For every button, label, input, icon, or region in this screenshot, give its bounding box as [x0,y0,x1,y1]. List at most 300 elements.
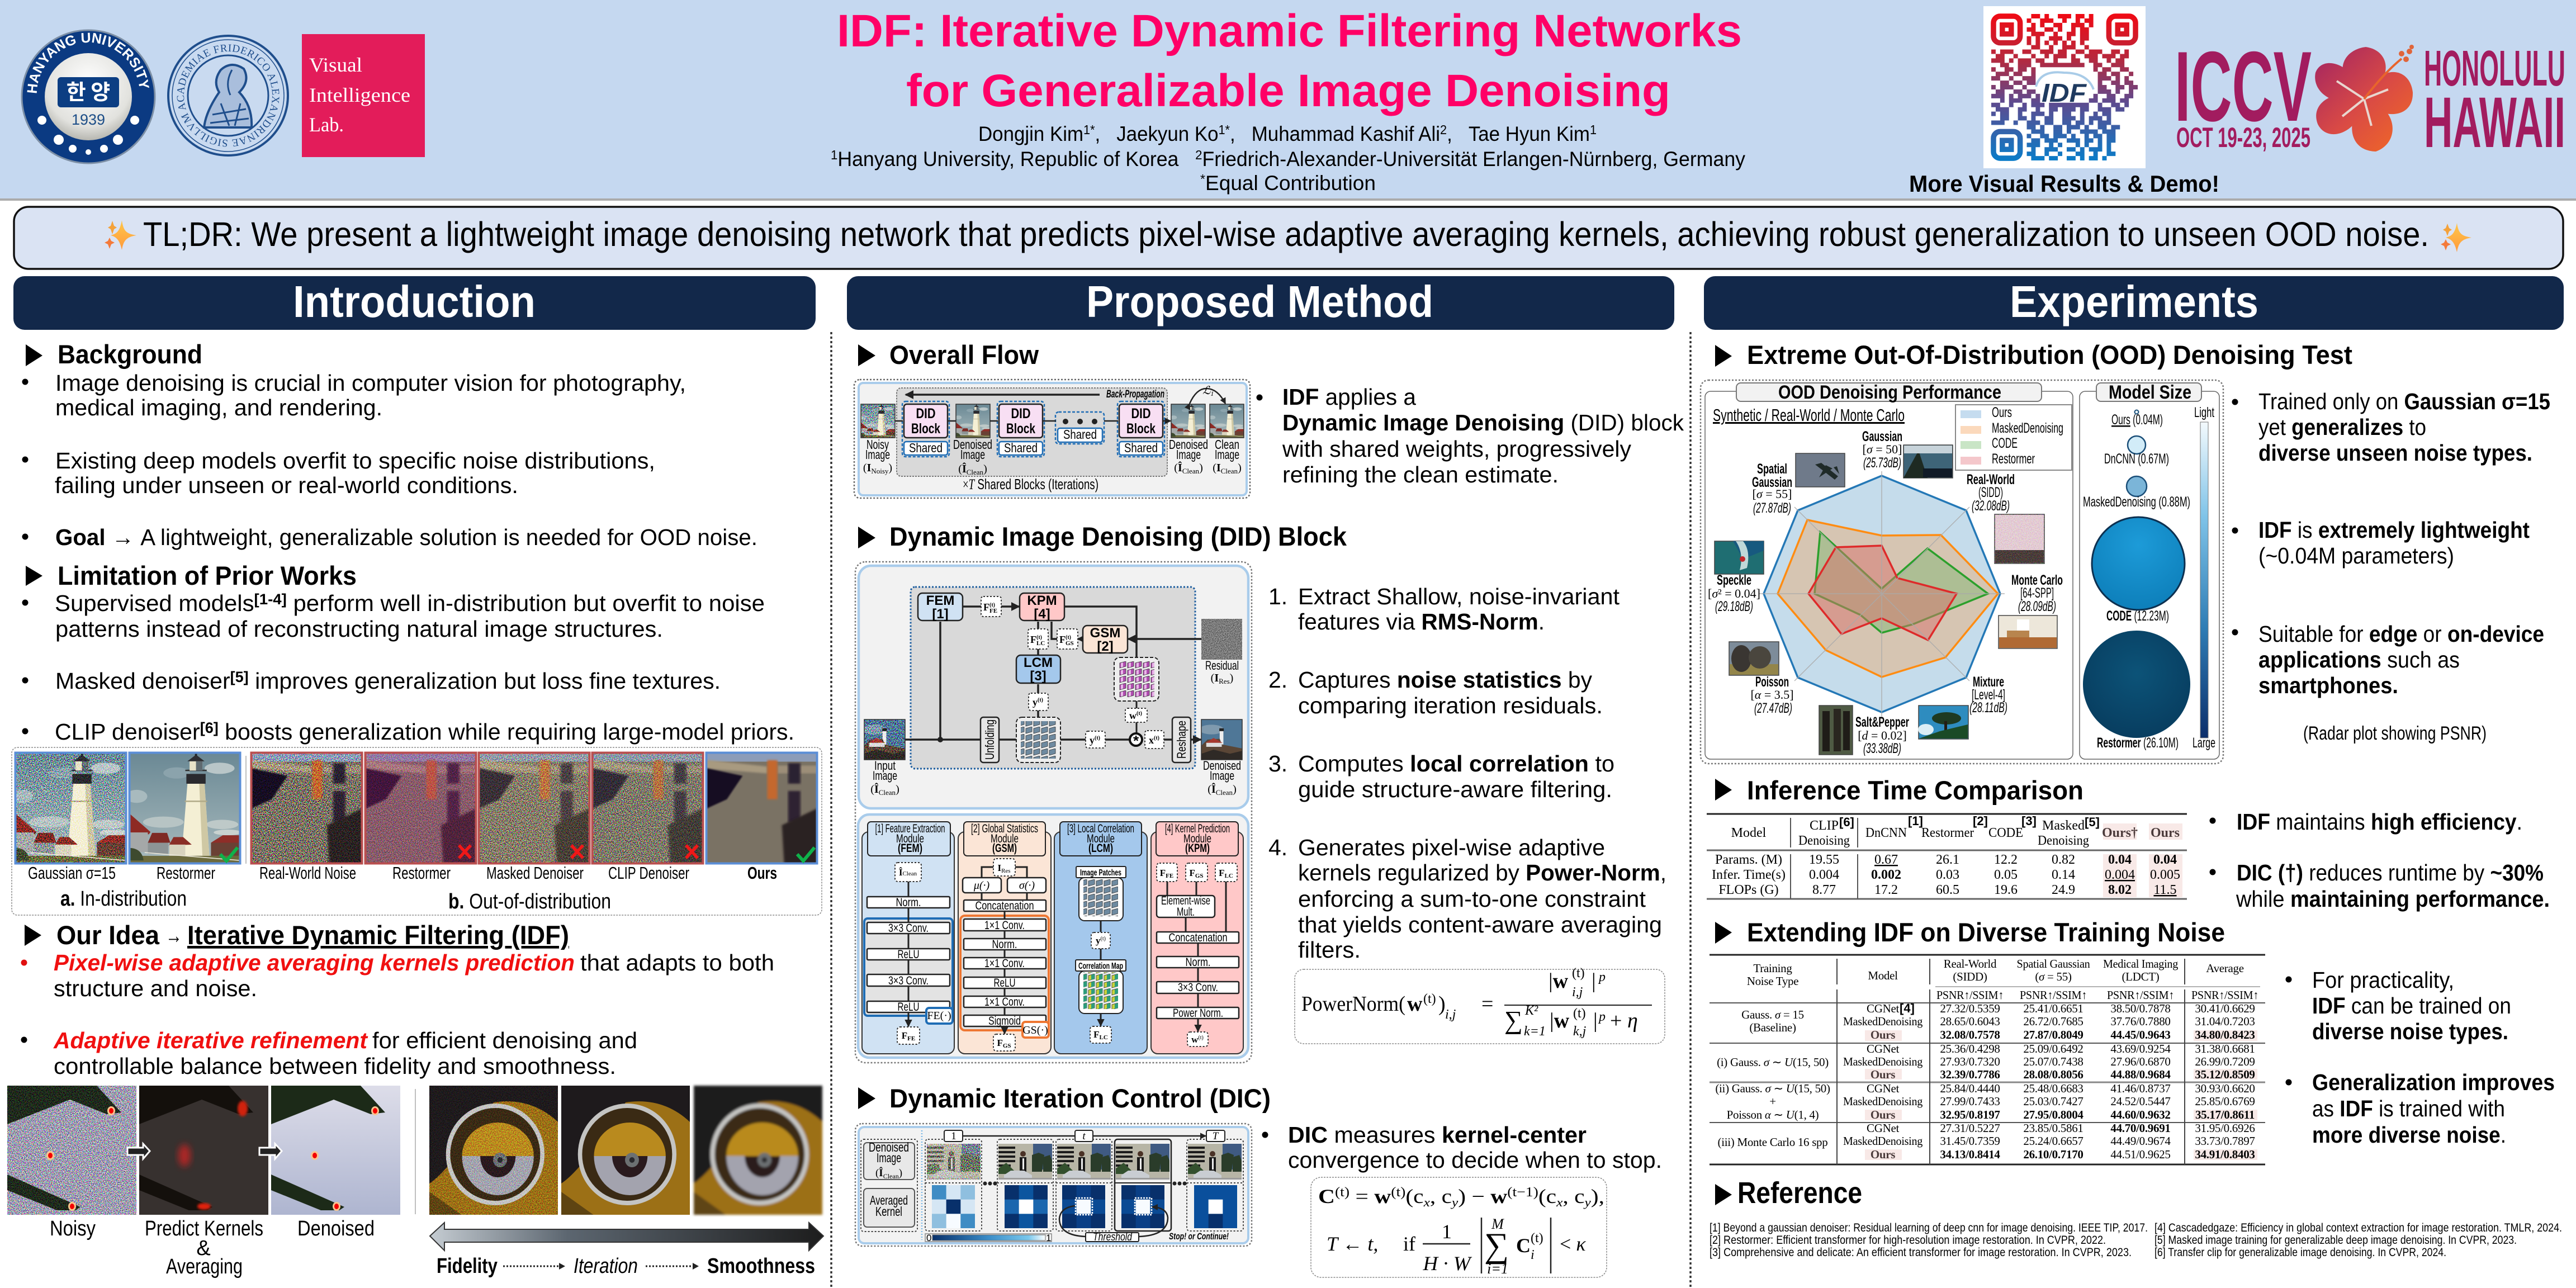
formula: DIC stopping rule: (c [1538,1185,1556,1208]
table: diverse training noise: Noise Type [1747,974,1798,988]
formula: PowerNorm: i,j [1572,985,1583,1000]
table: inference time comparison: 0.004 [1809,868,1839,882]
table: diverse training noise: 23.85/0.5861 [2023,1121,2083,1135]
figure: DIC: Clean [883,1172,899,1180]
header band [0,0,2576,201]
figure: fidelity to smoothness iterations: Iteration [574,1254,638,1278]
table: diverse training noise: 25.09/0.6492 [2023,1042,2083,1055]
table: diverse training noise: (LDCT) [2122,970,2160,983]
table: diverse training noise: CGNet [1867,1042,1899,1055]
table: inference time comparison: 8.02 [2108,883,2132,897]
module: FEM: 3×3 Conv. [888,922,929,935]
legend: Ours [1992,405,2012,420]
figure: overall flow: ) [983,463,987,475]
figure: overall flow: Clean [1221,467,1238,475]
module: KPM: Element-wise [1161,894,1210,907]
formula: DIC stopping rule: w [1374,1185,1391,1208]
module: FEM: FE(·) [927,1010,951,1022]
panel: Our Idea: controllable balance between fidelity and smoothness. [54,1053,616,1079]
radar polygons [1759,471,2005,717]
panel: Limitation of Prior Works: CLIP denoiser [55,719,200,745]
formula: DIC stopping rule: H · W [1422,1252,1472,1275]
table: diverse training noise: [4] [1900,1001,1915,1015]
module: LCM [1054,822,1147,1054]
heading: DID Block: Dynamic Image Denoising (DID) Block [889,522,1347,551]
table: diverse training noise: 32.95/0.8197 [1940,1108,2000,1121]
text: IDF overview [1257,384,1684,487]
text: DIC description: DIC measures kernel-center [1288,1122,1587,1148]
text: DID steps: filters. [1298,937,1361,963]
formula: PowerNorm: | [1593,1009,1598,1033]
radar axis labels: Gaussian [1752,475,1792,490]
figure: overall flow: ℒ [1202,385,1210,397]
figure: DID block architecture: ) [1230,672,1233,684]
formula: DIC stopping rule: M [1491,1216,1504,1232]
formula: PowerNorm: k,j [1573,1024,1587,1039]
table: diverse training noise: + [1769,1095,1776,1108]
figure: fidelity to smoothness iterations: Smoothness [707,1254,815,1278]
table: diverse training noise: 35.12/0.8509 [2195,1068,2255,1081]
text: inference takeaways: while maintaining performance. [2236,886,2550,912]
table: diverse training noise: 24.52/0.5447 [2110,1095,2171,1108]
formula: PowerNorm: K² [1524,1003,1538,1018]
table: inference time comparison: 0.67 [1874,853,1898,867]
radar axis labels: [σ = 55] [1753,487,1792,501]
table: inference time comparison [1707,814,2187,899]
module: GSM: 1×1 Conv. [984,957,1025,970]
formula: DIC stopping rule: (c [1405,1185,1424,1208]
text: OOD takeaways: IDF is extremely lightweight [2258,517,2530,543]
text: OOD takeaways: applications such as [2258,647,2460,673]
radar axis labels: [Level-4] [1972,687,2005,703]
radar axis labels: Spatial [1757,461,1787,477]
authors and affiliations [831,122,1745,195]
figure: overall flow: (I [1213,462,1221,474]
formula: DIC stopping rule: i=1 [1487,1261,1508,1277]
module: KPM: Module [1183,832,1211,845]
module: LCM: Image Patches [1080,868,1121,878]
table: inference time comparison: Denoising [1798,834,1850,848]
formula: DIC stopping rule: w [1490,1185,1507,1208]
panel: Limitation of Prior Works: Masked denoiser [55,668,230,694]
figure: overall flow: (Î [1174,462,1182,474]
table: diverse training noise: CGNet [1867,1002,1899,1015]
module: FEM: ReLU [898,948,919,961]
panel: Limitation of Prior Works: [5] [230,669,249,685]
text: inference takeaways: IDF maintains high efficiency. [2237,809,2522,835]
table: inference time comparison: 0.04 [2108,853,2132,867]
radar axis labels [1708,429,2063,756]
formula: DIC stopping rule: (t) [1335,1185,1349,1200]
module: FEM: FE [907,1035,915,1042]
table: inference time comparison: Ours [2151,826,2180,840]
module: FEM: F [902,1030,907,1041]
figure: DIC: (Î [875,1167,883,1179]
formula: DIC stopping rule: y [1451,1195,1459,1209]
radar thumbnails [1715,445,2057,755]
figure: fidelity to smoothness iterations [429,1086,823,1278]
figure: overall flow: Block [1126,421,1156,437]
text: inference takeaways [2209,809,2550,912]
section header: Proposed Method: Proposed Method [1086,277,1433,326]
module: FEM: Module [896,832,924,845]
panel: Background: Image denoising is crucial in computer vision for photography, [55,370,686,396]
formula: DIC stopping rule: x [1423,1195,1430,1209]
table: diverse training noise: 35.17/0.8611 [2195,1108,2255,1121]
table: diverse training noise: 30.41/0.6629 [2195,1002,2255,1015]
module: GSM: Norm. [992,938,1017,951]
text: diverse training takeaways: as IDF is trained with [2312,1096,2505,1121]
formula: PowerNorm: p [1598,970,1606,984]
panel: Limitation of Prior Works: boosts generalization while requiring large-model priors. [219,719,794,745]
table: inference time comparison: 19.55 [1809,853,1839,867]
radar axis labels: (SIDD) [1978,485,2003,500]
table: diverse training noise: 25.84/0.4440 [1940,1082,2000,1095]
module: LCM: Correlation Map [1078,962,1123,971]
text: DID steps: 4. [1268,835,1287,860]
text: DID steps: comparing iteration residuals. [1298,693,1603,718]
logo: Visual Intelligence Lab: Visual [309,54,362,76]
figure: overall flow: Image [1176,447,1201,462]
figure: DID block architecture: (Î [870,783,879,795]
module: LCM: Module [1087,832,1115,845]
panel: Limitation of Prior Works: [6] [200,719,219,736]
text: IDF overview: refining the clean estimate. [1282,462,1559,487]
table: inference time comparison: [6] [1839,815,1854,829]
formula: DIC stopping rule: i [1531,1248,1535,1262]
table: diverse training noise: 25.41/0.6651 [2023,1002,2083,1015]
figure: DID block architecture: F [983,602,989,613]
text: OOD takeaways [2232,389,2550,744]
heading: OOD test: Extreme Out-Of-Distribution (OOD) Denoising Test [1747,340,2352,370]
heading: Inference Time: Inference Time Comparison [1747,775,2083,805]
module: GSM: [2] Global Statistics [971,822,1038,835]
module: KPM: [4] Kernel Prediction [1165,822,1230,835]
figure: OOD radar chart: Synthetic / Real-World / Monte Carlo [1713,405,1905,425]
table: diverse training noise: 41.46/0.8737 [2110,1082,2171,1095]
panel: Limitation of Prior Works: Supervised models [55,590,250,616]
figure: in-distribution vs out-of-distribution: Restormer [392,863,451,883]
panel: Background: Background [58,339,202,369]
figure: DID block architecture: w [1129,710,1137,721]
figure: overall flow: DID [916,406,936,422]
table: inference time comparison: 24.9 [2052,883,2075,897]
radar axis labels: [σ = 50] [1863,442,1902,456]
figure: model size [2080,382,2219,759]
figure: DIC: Kernel [875,1204,902,1219]
figure: DID block architecture: y [1090,735,1095,746]
formula: PowerNorm: PowerNorm( [1301,992,1405,1016]
figure: DID block architecture: Image [1210,769,1234,783]
formula: PowerNorm: k=1 [1524,1024,1546,1039]
figure: DID block architecture: (t) [1038,697,1043,703]
figure: DID block architecture: [2] [1097,639,1114,654]
figure: DID block architecture: * [1133,732,1139,749]
formula: DIC stopping rule: , c [1562,1185,1585,1208]
figure: OOD radar chart: OOD Denoising Performance [1778,382,2001,403]
table: diverse training noise: (i) Gauss. σ ∼ U(15, 50) [1717,1055,1829,1069]
module: LCM: [3] Local Correlation [1067,822,1134,835]
formula: PowerNorm: (t) [1572,966,1585,981]
figure: DID block architecture: Clean [879,788,896,797]
panel: Background: medical imaging, and rendering. [55,395,382,420]
table: inference time comparison: Ours† [2102,826,2138,840]
figure: model size: MaskedDenoising (0.88M) [2083,494,2190,510]
figure: in-distribution vs out-of-distribution: Real-World Noise [259,863,356,883]
figure: overall flow: Block [1006,421,1035,437]
module: KPM: GS [1195,873,1204,879]
module: KPM: (t) [1198,1035,1204,1041]
figure: DID block architecture: GS [1066,640,1074,647]
figure: in-distribution vs out-of-distribution: Gaussian σ=15 [28,863,116,883]
text: OOD takeaways: Trained only on Gaussian σ=15 [2258,389,2550,414]
table: inference time comparison: Masked [2042,818,2085,833]
table: inference time comparison: Params. (M) [1715,853,1782,867]
table: diverse training noise: 44.60/0.9632 [2110,1108,2171,1121]
table: inference time comparison: 26.1 [1936,853,1959,867]
figure: in-distribution vs out-of-distribution: Ours [747,863,777,883]
logo: Hanyang University: 한 양 [67,75,110,106]
figure: model size: DnCNN (0.67M) [2104,451,2169,467]
table: diverse training noise: 26.10/0.7170 [2023,1148,2083,1161]
table: diverse training noise: 31.95/0.6926 [2195,1121,2255,1135]
table: inference time comparison: 0.002 [1871,868,1901,882]
table: inference time comparison: 0.14 [2052,868,2075,882]
figure: DID block architecture: [1] [932,607,949,622]
section header: Introduction: Introduction [293,277,536,326]
text: DID steps: enforcing a sum-to-one constraint [1298,886,1646,912]
heading: Extending IDF: Extending IDF on Diverse Training Noise [1747,917,2225,947]
figure: overall flow: Denoised [953,437,992,452]
table: diverse training noise: (Baseline) [1749,1021,1796,1034]
table: diverse training noise: MaskedDenoising [1843,1134,1923,1148]
figure: overall flow: ) [1199,462,1203,474]
table: diverse training noise: (ii) Gauss. σ ∼ U(15, 50) [1715,1082,1830,1095]
table: diverse training noise: Ours [1871,1148,1895,1161]
figure: DIC: Stop! or Continue! [1169,1231,1229,1242]
module: KPM: Concatenation [1168,931,1228,944]
figure: DID block architecture: GSM [1090,626,1120,641]
table: diverse training noise: 34.80/0.8423 [2195,1028,2255,1041]
formula: DIC stopping rule: (t) [1531,1231,1543,1246]
radar axis labels: Monte Carlo [2011,572,2063,588]
table: diverse training noise: 32.08/0.7578 [1940,1028,2000,1041]
text: DIC description: convergence to decide when to stop. [1288,1147,1662,1173]
formula: PowerNorm: = [1481,992,1493,1016]
ICCV logo [2175,31,2565,163]
module: GSM: Module [991,832,1019,845]
table: inference time comparison: CODE [1988,826,2023,840]
module: LCM: (t) [1101,936,1106,942]
module: KPM: F [1189,868,1195,878]
formula: DIC stopping rule: , c [1430,1185,1452,1208]
module: GSM [958,822,1051,1054]
table: diverse training noise: 28.65/0.6043 [1940,1015,2000,1028]
table: inference time comparison: 60.5 [1936,883,1959,897]
module: GSM: GS [1003,1043,1011,1049]
table: diverse training noise: 34.91/0.8403 [2195,1148,2255,1161]
table: inference time comparison: 0.05 [1994,868,2018,882]
table: diverse training noise: 38.50/0.7878 [2110,1002,2171,1015]
table: diverse training noise: MaskedDenoising [1843,1015,1923,1028]
QR code: IDF [2042,78,2087,107]
section header: Proposed Method [847,276,1674,330]
module: GSM: μ(·) [973,879,990,892]
logo: Hanyang University: 1939 [72,111,105,128]
panel: Our Idea [21,920,774,1079]
figure: overall flow: DID [1011,406,1031,422]
figure: DID block architecture: Image [873,769,897,783]
module: GSM: GS(·) [1022,1024,1048,1036]
authors and affiliations: , Tae Hyun Kim [1447,122,1590,145]
figure: in-distribution vs out-of-distribution: a. In-distribution [60,887,187,911]
table: diverse training noise: 37.76/0.7880 [2110,1015,2171,1028]
figure: DID block architecture: Res [1219,677,1230,685]
table: diverse training noise: Gauss. σ = 15 [1741,1008,1804,1021]
table: diverse training noise: 30.93/0.6620 [2195,1082,2255,1095]
heading: Overall Flow: Overall Flow [889,340,1039,370]
authors and affiliations: 1 [831,148,837,162]
table: diverse training noise: 31.38/0.6681 [2195,1042,2255,1055]
table: diverse training noise: Ours [1871,1068,1895,1081]
formula: DIC stopping rule: < κ [1560,1233,1586,1255]
panel: Our Idea: for efficient denoising and [372,1027,637,1053]
table: diverse training noise: MaskedDenoising [1843,1055,1923,1068]
panel: Background: Goal → A lightweight, generalizable solution is needed for OOD noise. [55,524,757,550]
authors and affiliations: 2 [1195,148,1202,162]
figure: model size: Ours (0.04M) [2111,412,2163,428]
figure: model size: Large [2193,735,2215,751]
formula: PowerNorm: (t) [1573,1006,1586,1021]
table: diverse training noise: 25.03/0.7427 [2023,1095,2083,1108]
formula: DIC stopping rule: 1 [1442,1220,1452,1243]
authors and affiliations: 1 [1590,122,1597,137]
table: inference time comparison: CLIP [1810,818,1839,833]
module: FEM: [1] Feature Extraction [875,822,945,835]
figure: in-distribution vs out-of-distribution: Masked Denoiser [486,863,584,883]
authors and affiliations: Equal Contribution [1205,172,1376,195]
formula: DIC stopping rule: x [1556,1195,1563,1209]
table: diverse training noise: (σ = 55) [2035,970,2072,983]
table: inference time comparison: 0.04 [2153,853,2177,867]
text: DID steps: guide structure-aware filtering. [1298,776,1612,802]
legend: Restormer [1992,451,2035,467]
radar axis labels: (29.18dB) [1715,599,1753,614]
TL;DR banner: TL;DR: We present a lightweight image denoising network that predicts pixel-wise adaptive averaging kernels, achieving robust generalization to unseen OOD noise. [143,215,2429,253]
text: diverse training takeaways: Generalization improves [2312,1069,2555,1095]
table: inference time comparison: 12.2 [1994,853,2018,867]
figure: model size: Model Size [2109,382,2191,403]
panel: Our Idea: Pixel-wise adaptive averaging kernels prediction [54,950,575,976]
table: inference time comparison: 0.03 [1936,868,1959,882]
logo: Hanyang University: HANYANG UNIVERSITY [27,32,149,93]
table: diverse training noise: CGNet [1867,1121,1899,1135]
table: inference time comparison: 0.82 [2052,853,2075,867]
module: KPM: 3×3 Conv. [1178,981,1218,994]
table: inference time comparison: 11.5 [2153,883,2177,897]
title: for Generalizable Image Denoising [906,65,1670,116]
figure: model size: Restormer (26.10M) [2097,735,2179,751]
formula: PowerNorm: + η [1610,1009,1638,1033]
text: inference takeaways: DIC (†) reduces runtime by ~30% [2237,860,2544,886]
figure: DID block architecture: (I [1211,672,1219,684]
table: diverse training noise: 31.45/0.7359 [1940,1134,2000,1148]
text: OOD takeaways: (~0.04M parameters) [2258,543,2454,569]
references: [1] Beyond a gaussian denoiser: Residual learning of deep cnn for image denoising. IEEE TIP, 2017. [1710,1221,2148,1234]
logo: Visual Intelligence Lab: Intelligence [309,84,410,106]
logo: Visual Intelligence Lab [302,34,425,157]
module: FEM: ReLU [898,1001,919,1014]
figure: DID block architecture: Clean [1216,788,1233,797]
authors and affiliations: 2 [1440,122,1447,137]
radar axis labels: (28.09dB) [2018,599,2056,614]
table: diverse training noise: (iii) Monte Carlo 16 spp [1718,1135,1827,1149]
radar axis labels: (33.38dB) [1863,741,1901,756]
module: GSM: 1×1 Conv. [984,996,1025,1008]
text: diverse training takeaways: For practicality, [2312,967,2454,993]
panel: Limitation of Prior Works [22,561,794,745]
figure: overall flow: ) [1238,462,1242,474]
figure: DIC: Averaged [870,1193,908,1208]
figure: OOD radar chart [1701,380,2223,764]
table: diverse training noise: 43.69/0.9254 [2110,1042,2171,1055]
text: DID steps: features via RMS-Norm. [1298,609,1545,634]
formula: DIC stopping rule: T ← t, [1327,1233,1378,1255]
panel: Limitation of Prior Works: improves generalization but loss fine textures. [249,668,721,694]
module: KPM: Power Norm. [1173,1007,1223,1020]
figure: overall flow: Noisy [866,437,889,452]
formula: DIC stopping rule: y [1583,1195,1591,1209]
figure: in-distribution vs out-of-distribution: Restormer [157,863,215,883]
figure: DIC: Image [877,1150,901,1165]
authors and affiliations: , Muhammad Kashif Ali [1230,122,1440,145]
text: OOD takeaways: diverse unseen noise types. [2258,440,2532,466]
figure: DID block architecture [855,562,1252,1063]
module: LCM: F [1093,1029,1100,1040]
figure: predict kernels pipeline [7,1086,415,1278]
panel: Our Idea: Adaptive iterative refinement [53,1027,368,1053]
ICCV logo: ICCV [2175,31,2312,142]
table: diverse training noise: 27.96/0.6870 [2110,1055,2171,1068]
figure: predict kernels pipeline: & [196,1237,211,1260]
authors and affiliations: * [1200,172,1205,186]
table: diverse training noise: 44.45/0.9643 [2110,1028,2171,1041]
table: inference time comparison: 0.004 [2105,868,2135,882]
radar axis labels: Salt&Pepper [1855,714,1909,730]
table: diverse training noise: PSNR↑/SSIM↑ [2191,988,2258,1002]
figure: predict kernels pipeline: Averaging [166,1255,243,1278]
table: diverse training noise: 27.99/0.7433 [1940,1095,2000,1108]
figure: model size: CODE (12.23M) [2106,608,2169,624]
figure: overall flow: Block [911,421,940,437]
figure: overall flow: Shared [1124,441,1158,455]
table: inference time comparison: FLOPs (G) [1718,883,1779,897]
table: diverse training noise: 32.39/0.7786 [1940,1068,2000,1081]
legend: MaskedDenoising [1992,420,2063,436]
QR caption: More Visual Results & Demo! [1909,171,2219,197]
table: diverse training noise: 28.08/0.8056 [2023,1068,2083,1081]
title: IDF: Iterative Dynamic Filtering Networks [837,6,1742,56]
text: DID steps: kernels regularized by Power-Norm, [1298,860,1666,886]
authors and affiliations: , Jaekyun Ko [1095,122,1219,145]
module: GSM: F [997,1038,1003,1048]
module: LCM: (LCM) [1088,842,1113,855]
authors and affiliations: 1* [1083,122,1095,137]
figure: overall flow: (I [863,462,871,474]
formula: DIC stopping rule: ), [1591,1185,1604,1208]
panel: Our Idea: structure and noise. [54,976,257,1001]
logo: Hanyang University [21,29,155,164]
